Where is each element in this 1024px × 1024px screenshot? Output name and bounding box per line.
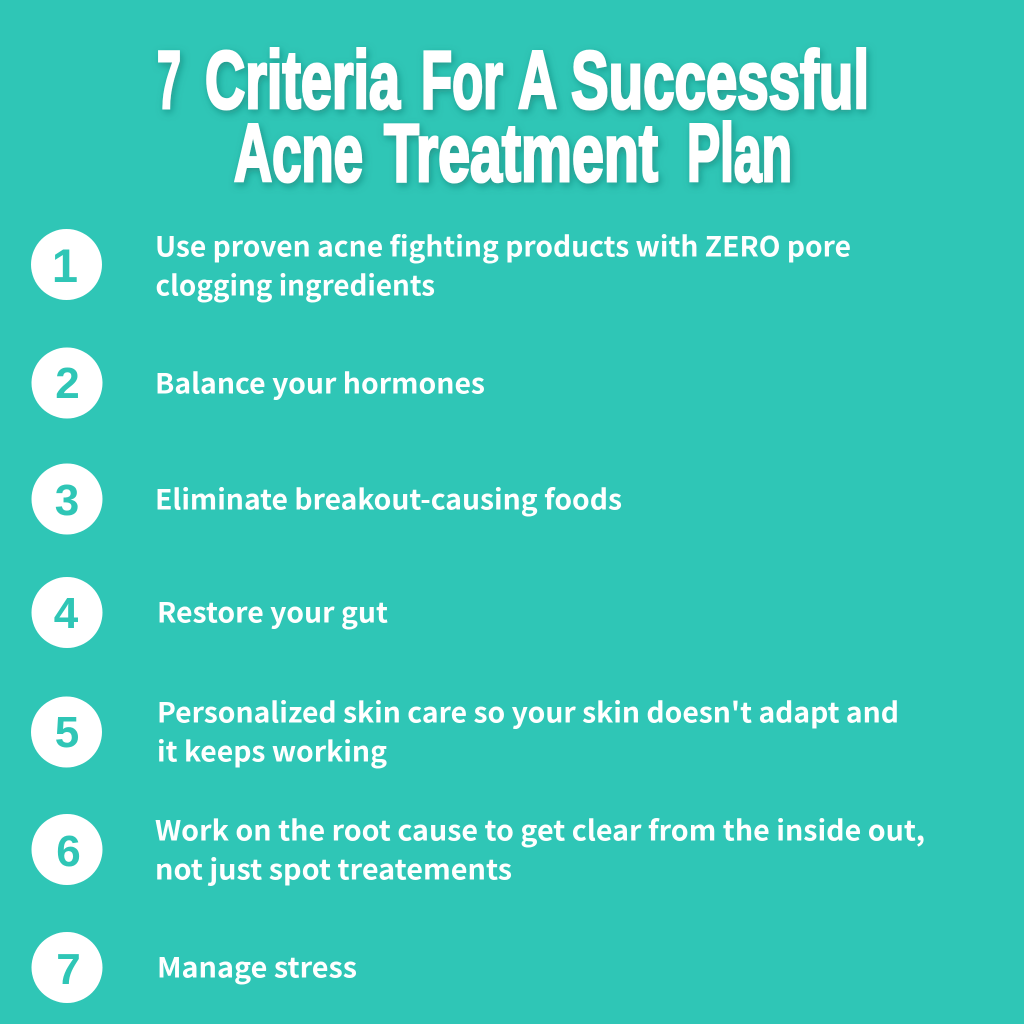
title: Acne — [234, 108, 363, 199]
number badge 3: 3 — [55, 476, 79, 525]
text 7: Manage stress — [157, 946, 357, 986]
number badge 7: 7 — [56, 945, 81, 994]
text 5: it keeps working — [157, 730, 387, 770]
text 1 — [155, 226, 851, 304]
text 6: not just spot treatements — [155, 848, 512, 888]
item 6 — [32, 810, 925, 888]
number badge 6: 6 — [56, 827, 81, 876]
text 1: Use proven acne fighting products with ZERO pore — [155, 226, 851, 266]
item 2 — [32, 348, 485, 418]
title: 7 — [157, 35, 181, 126]
number badge 4: 4 — [54, 589, 79, 638]
number badge 5: 5 — [55, 708, 79, 757]
text 2: Balance your hormones — [155, 362, 485, 402]
number badge 5 — [31, 696, 102, 768]
text 5: Personalized skin care so your skin doesn't adapt and — [157, 692, 899, 732]
number badge 2 — [32, 348, 102, 418]
title: Treatment — [384, 108, 658, 199]
text 5 — [157, 692, 899, 770]
title: Plan — [687, 108, 792, 199]
number badge 4 — [32, 577, 102, 648]
item 3 — [32, 464, 622, 534]
text 6 — [155, 810, 925, 888]
text 4: Restore your gut — [157, 592, 388, 632]
number badge 2: 2 — [55, 359, 80, 408]
item 5 — [31, 692, 899, 770]
title: Successful — [571, 35, 869, 126]
item 1 — [31, 226, 851, 304]
item 4 — [32, 577, 388, 648]
title: A — [518, 35, 557, 126]
number badge 3 — [32, 464, 102, 534]
title: For — [421, 35, 503, 126]
number badge 6 — [32, 814, 102, 885]
text 6: Work on the root cause to get clear from the inside out, — [155, 810, 925, 850]
number badge 7 — [32, 932, 102, 1003]
text 3: Eliminate breakout-causing foods — [155, 478, 622, 518]
title: Criteria — [205, 35, 401, 126]
title — [157, 35, 869, 199]
item 7 — [32, 932, 357, 1003]
text 1: clogging ingredients — [156, 264, 435, 304]
number badge 1 — [31, 229, 102, 300]
number badge 1: 1 — [52, 239, 78, 292]
